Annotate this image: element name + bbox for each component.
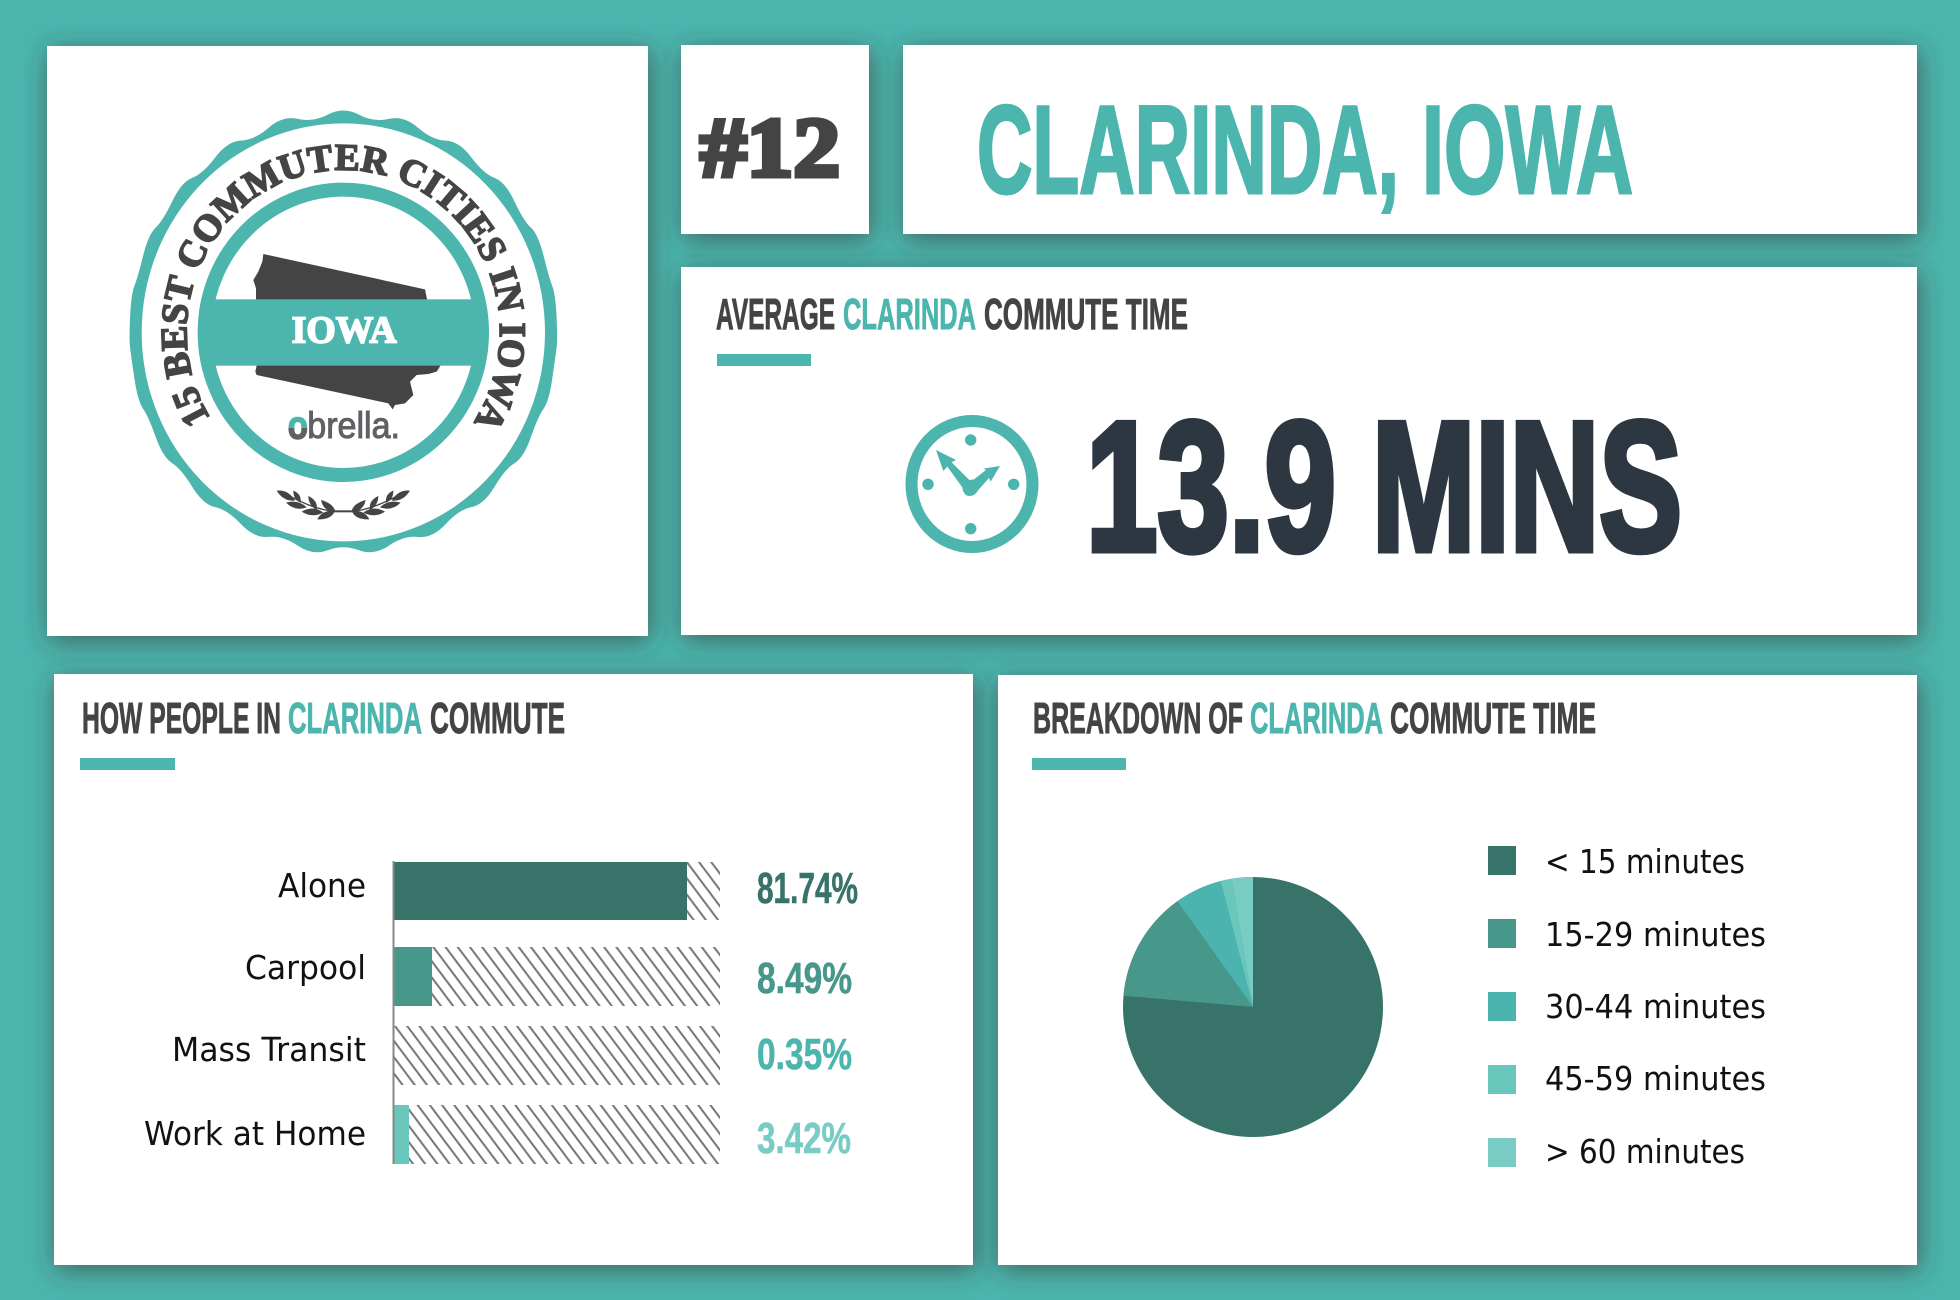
obrella logo: obrella. (288, 404, 400, 446)
legend: 15-29 minutes (1545, 915, 1766, 954)
bar chart: Mass Transit (172, 1030, 366, 1069)
inner ring (205, 190, 482, 475)
badge emblem (130, 110, 558, 552)
icon: Iowa state silhouette (253, 254, 441, 409)
bar chart: 3.42% (757, 1114, 851, 1163)
heading: how people commute: HOW PEOPLE IN (82, 694, 281, 743)
legend: < 15 minutes (1545, 842, 1745, 881)
legend: 30-44 minutes (1545, 987, 1766, 1026)
heading: how people commute: COMMUTE (430, 694, 565, 743)
bar chart: Carpool (245, 948, 366, 987)
panel: commute time breakdown (998, 675, 1917, 1265)
rank number: #12 (700, 101, 840, 195)
legend (1488, 842, 1766, 1171)
ribbon label: IOWA (292, 310, 397, 352)
title: city name: IOWA (1422, 81, 1633, 220)
icon: laurel (277, 491, 410, 519)
heading: commute time breakdown: COMMUTE TIME (1390, 694, 1596, 743)
legend: 45-59 minutes (1545, 1059, 1766, 1098)
big number: 13.9 (1086, 383, 1336, 589)
title: city name: CLARINDA, (977, 81, 1399, 220)
big number (1086, 383, 1682, 589)
scalloped badge edge (115, 96, 572, 569)
heading: average commute time: AVERAGE (716, 290, 835, 339)
heading: average commute time (716, 290, 1188, 339)
panel: how people commute (54, 674, 973, 1265)
bar chart: Alone (278, 866, 366, 905)
bar chart (144, 861, 858, 1164)
heading: commute time breakdown (1033, 694, 1596, 743)
heading underline (80, 758, 175, 770)
panel: rank (681, 45, 869, 234)
ribbon (197, 299, 490, 366)
icon: clock (912, 421, 1032, 547)
bar chart: 8.49% (757, 954, 852, 1003)
legend: > 60 minutes (1545, 1132, 1745, 1171)
heading: commute time breakdown: CLARINDA (1250, 694, 1383, 743)
panel: title (903, 45, 1917, 234)
panel: badge (31, 33, 668, 659)
circular badge text: 15 BEST COMMUTER CITIES IN IOWA (160, 144, 526, 426)
heading underline (1032, 758, 1126, 770)
heading: average commute time: COMMUTE TIME (984, 290, 1188, 339)
panel: average commute time (681, 267, 1917, 635)
bar chart: 0.35% (757, 1030, 852, 1079)
bar chart: Work at Home (144, 1114, 366, 1153)
pie chart (1123, 877, 1383, 1137)
heading: average commute time: CLARINDA (843, 290, 976, 339)
big number: MINS (1372, 383, 1682, 589)
bar chart: 81.74% (757, 864, 858, 913)
heading underline (717, 354, 811, 366)
heading: commute time breakdown: BREAKDOWN OF (1033, 694, 1243, 743)
heading: how people commute: CLARINDA (288, 694, 422, 743)
